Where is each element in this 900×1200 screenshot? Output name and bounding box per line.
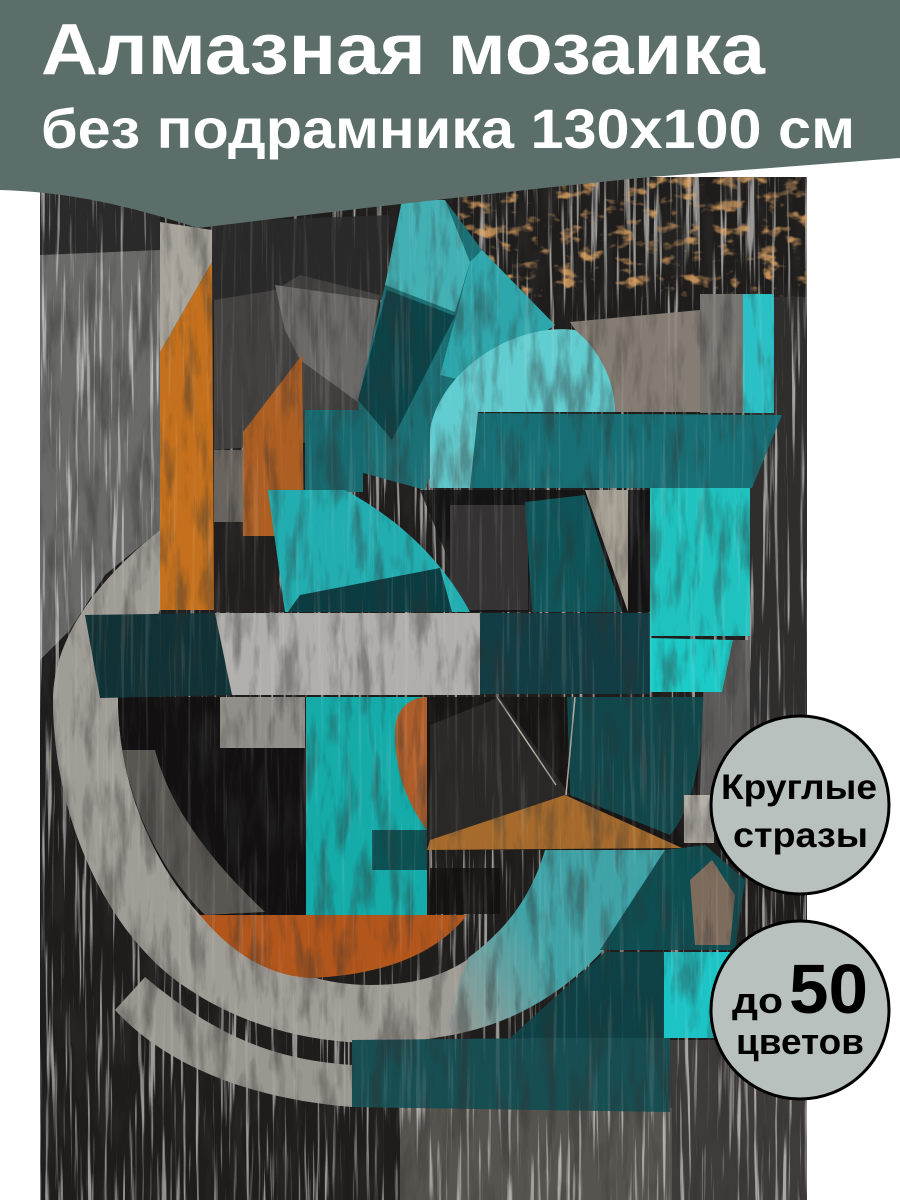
bar: light grey centre: [215, 613, 480, 695]
badge: round rhinestones: стразы: [733, 816, 868, 855]
bar: dark teal right: [480, 613, 650, 694]
lower grey arc: [115, 977, 352, 1107]
dark small block: [430, 868, 500, 914]
bottom centre streaks: [400, 1108, 672, 1200]
right grey block: [700, 294, 744, 413]
teal sail dark centre: [358, 290, 455, 440]
dark weathering texture: [40, 177, 807, 1200]
lower right streaks: [670, 1040, 807, 1200]
teal sail right: [440, 250, 555, 382]
grey panel behind orange: [214, 275, 380, 450]
central teal column: [306, 697, 427, 915]
small grey block: [214, 450, 244, 522]
teal sail base: [358, 200, 555, 490]
lower inner dark area: [118, 697, 306, 915]
badge: up to 50 colours: 50: [789, 950, 868, 1028]
dark centre lower: [427, 697, 707, 850]
right wall: [750, 297, 807, 730]
upper left dark plank: [40, 190, 160, 255]
crack line right: [566, 697, 575, 795]
bright teal lower block: [664, 952, 730, 1038]
badge: up to 50 colours: до: [732, 980, 783, 1021]
dark teal lower block: [510, 952, 665, 1038]
crack line left: [497, 697, 556, 785]
inner grey crescent: [122, 750, 265, 915]
dark teal corner: [372, 830, 427, 870]
background pale streaks: [40, 177, 807, 1200]
dark stripe in quarter circle: [288, 568, 452, 612]
orange bowl: [200, 915, 467, 978]
right dark teal panel: [600, 845, 745, 950]
left grey weathered plank: [40, 250, 160, 660]
grey right panel: [700, 640, 750, 795]
badge: up to 50 colours: цветов: [736, 1021, 864, 1062]
pale strip top: [160, 222, 212, 352]
orange slice: [395, 697, 427, 830]
header banner: [0, 0, 900, 228]
top dark panel: [212, 215, 390, 300]
top right rust area: [445, 177, 807, 297]
quarter circle teal: [268, 490, 470, 612]
light teal half circle: [430, 329, 615, 488]
badge: round rhinestones: Круглые: [721, 768, 877, 807]
panel: abstract mosaic artwork: [40, 177, 807, 1200]
teal sail light top: [385, 200, 470, 312]
bar: dark teal left: [85, 613, 232, 698]
orange wood strip: [427, 795, 682, 850]
teal square: [305, 410, 363, 492]
pale weathering texture: [40, 177, 807, 1200]
central grey patch: [450, 505, 528, 610]
badge: up to 50 colours: [711, 921, 889, 1099]
grey orange fragment: [690, 860, 735, 945]
pale grey wedge: [585, 490, 628, 612]
small grey panel: [220, 697, 305, 748]
pale fragment: [684, 795, 714, 843]
artwork background wall: [40, 177, 807, 1200]
dark lower block: [214, 522, 285, 612]
tall orange plank: [160, 262, 214, 610]
bar: bright teal right: [650, 638, 733, 692]
dark grey panel: [430, 697, 570, 840]
dark teal circle section: [567, 697, 705, 835]
dark teal wedge: [525, 495, 622, 612]
right teal block: [743, 294, 774, 413]
bright teal tall block: [650, 488, 750, 636]
horizontal teal bar: [470, 413, 782, 488]
grey brown plank: [570, 310, 700, 412]
central dark area: [420, 490, 650, 612]
badge: round rhinestones: [711, 716, 889, 894]
title line one: Алмазная мозаика: [41, 10, 766, 90]
ring teal right section: [440, 850, 665, 1037]
small orange plank: [243, 355, 304, 536]
bottom teal plank: [352, 1038, 670, 1112]
light grey patch: [275, 285, 378, 405]
big grey ring left and bottom: [53, 530, 470, 1043]
title line two: без подрамника 130х100 см: [41, 97, 855, 160]
